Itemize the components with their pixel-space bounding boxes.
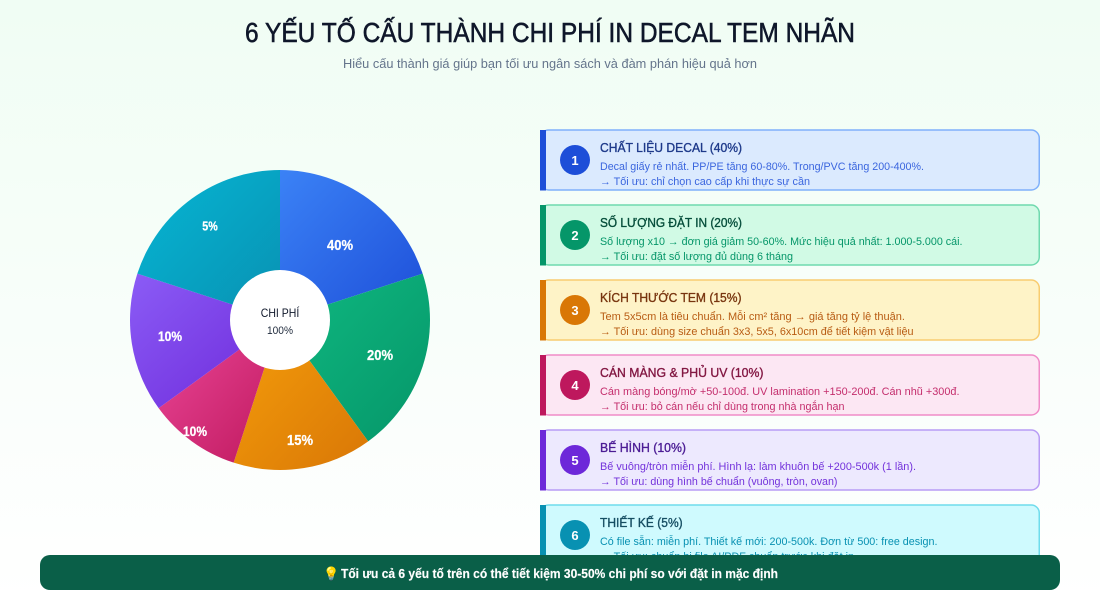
card 1 heading: CHẤT LIỆU DECAL (40%)	[600, 140, 742, 155]
slice: bế hình 10%	[130, 274, 280, 408]
card 1 details: → Tối ưu: chỉ chọn cao cấp khi thực sự cần	[600, 176, 810, 188]
number badge 1	[560, 145, 590, 175]
card 3 details: Tem 5x5cm là tiêu chuẩn. Mỗi cm² tăng → giá tăng tỷ lệ thuận.	[600, 310, 905, 323]
card 6 heading: THIẾT KẾ (5%)	[600, 515, 683, 530]
card 1: chất liệu decal	[540, 130, 1039, 190]
bottom banner	[40, 555, 1060, 590]
card 4 details	[600, 386, 960, 413]
slice percentages: 10%	[158, 329, 182, 344]
card 5: bế hình	[540, 430, 1039, 490]
card 1 details	[600, 161, 924, 188]
number badge 4: 4	[571, 378, 579, 393]
card 5 details	[600, 460, 916, 488]
card 2 details: Số lượng x10 → đơn giá giảm 50-60%. Mức hiệu quả nhất: 1.000-5.000 cái.	[600, 236, 962, 248]
card 6 details	[600, 535, 938, 563]
number badge 4	[560, 370, 590, 400]
number badge 6	[560, 520, 590, 550]
card 4 details: Cán màng bóng/mờ +50-100đ. UV lamination +150-200đ. Cán nhũ +300đ.	[600, 386, 960, 398]
slice percentages: 5%	[202, 218, 218, 234]
donut centre	[230, 270, 330, 370]
number badge 2: 2	[571, 228, 579, 243]
card 5 details: → Tối ưu: dùng hình bế chuẩn (vuông, tròn, ovan)	[600, 476, 838, 488]
number badge 3	[560, 295, 590, 325]
card 5 details: Bế vuông/tròn miễn phí. Hình lạ: làm khuôn bế +200-500k (1 lần).	[600, 460, 916, 473]
card 5 heading: BẾ HÌNH (10%)	[600, 440, 686, 455]
card 2 details	[600, 236, 962, 263]
card 3: kích thước tem	[540, 280, 1039, 340]
number badge 1: 1	[571, 153, 579, 168]
card 4: cán màng và phủ uv	[540, 355, 1039, 416]
centre label	[261, 305, 300, 337]
centre label: 100%	[267, 325, 293, 337]
banner message: Tối ưu cả 6 yếu tố trên có thể tiết kiệm 30-50% chi phí so với đặt in mặc định	[341, 566, 778, 581]
slice percentages	[158, 218, 393, 449]
card 2 heading: SỐ LƯỢNG ĐẶT IN (20%)	[600, 215, 742, 230]
icon: light bulb: 💡	[323, 566, 339, 581]
slice: thiết kế 5%	[137, 170, 280, 320]
card 1 details: Decal giấy rẻ nhất. PP/PE tăng 60-80%. Trong/PVC tăng 200-400%.	[600, 161, 924, 173]
slice: cán màng 10%	[159, 320, 280, 463]
card 6: thiết kế	[540, 505, 1039, 566]
card 3 heading: KÍCH THƯỚC TEM (15%)	[600, 290, 742, 305]
number badge 2	[560, 220, 590, 250]
slice percentages: 40%	[327, 237, 353, 254]
donut chart	[130, 170, 430, 470]
number badge 6: 6	[571, 528, 579, 543]
slice percentages: 15%	[287, 432, 313, 449]
title: 6 YẾU TỐ CẤU THÀNH CHI PHÍ IN DECAL TEM NHÃN	[245, 16, 855, 48]
slice: chất liệu decal 40%	[280, 170, 423, 320]
number badge 3: 3	[571, 303, 579, 318]
card 2 details: → Tối ưu: đặt số lượng đủ dùng 6 tháng	[600, 251, 793, 263]
card 3 details: → Tối ưu: dùng size chuẩn 3x3, 5x5, 6x10cm để tiết kiệm vật liệu	[600, 326, 914, 338]
slice: số lượng 20%	[280, 274, 430, 441]
slice percentages: 10%	[183, 424, 207, 439]
card 6 details: → Tối ưu: chuẩn bị file AI/PDF chuẩn trước khi đặt in	[600, 551, 854, 563]
slice percentages: 20%	[367, 347, 393, 364]
card 3 details	[600, 310, 914, 338]
subtitle: Hiểu cấu thành giá giúp bạn tối ưu ngân sách và đàm phán hiệu quả hơn	[343, 56, 757, 71]
card 6 details: Có file sẵn: miễn phí. Thiết kế mới: 200-500k. Đơn từ 500: free design.	[600, 535, 938, 548]
number badge 5	[560, 445, 590, 475]
card 2: số lượng đặt in	[540, 205, 1039, 266]
number badge 5: 5	[571, 453, 579, 468]
card 4 details: → Tối ưu: bỏ cán nếu chỉ dùng trong nhà ngắn hạn	[600, 400, 844, 413]
slice: kích thước 15%	[234, 320, 368, 470]
centre label: CHI PHÍ	[261, 305, 300, 320]
card 4 heading: CÁN MÀNG & PHỦ UV (10%)	[600, 365, 764, 380]
